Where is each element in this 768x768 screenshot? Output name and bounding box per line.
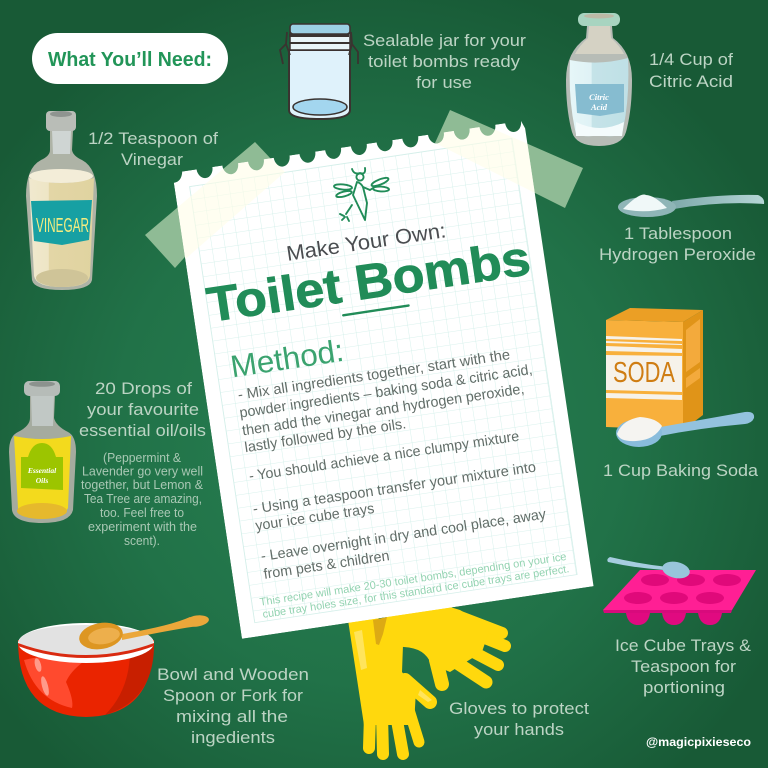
- icon: citric acid bottle: [566, 13, 632, 146]
- label: essential oils: 20 Drops of: [95, 379, 192, 398]
- note: essential oil suggestions: [81, 451, 204, 548]
- paper sheet: [166, 115, 601, 645]
- label: essential oils: your favourite: [87, 400, 199, 419]
- method steps: lastly followed by the oils.: [244, 416, 407, 456]
- paper grid: [190, 138, 577, 623]
- note: essential oil suggestions: Lavender go very well: [82, 464, 203, 478]
- label: gloves: [449, 699, 589, 739]
- label: citric acid: 1/4 Cup of: [649, 50, 733, 69]
- label: vinegar: Vinegar: [121, 150, 183, 169]
- label: essential oils: [79, 379, 206, 440]
- note paper: [174, 121, 594, 639]
- icon: essential oil bottle: Essential: [27, 466, 57, 475]
- tape behind paper: [145, 110, 583, 268]
- note: essential oil suggestions: together, but Lemon &: [81, 478, 204, 492]
- label: bowl: mixing all the: [176, 707, 288, 726]
- note: essential oil suggestions: too. Feel free to: [100, 506, 184, 520]
- label: bowl: ingedients: [191, 728, 275, 747]
- label: trays: [615, 636, 752, 697]
- note: essential oil suggestions: scent).: [124, 534, 160, 548]
- method steps: - Leave overnight in dry and cool place, away: [260, 506, 548, 565]
- icon: essential oil bottle: [9, 381, 76, 523]
- label: bowl: Spoon or Fork for: [163, 686, 303, 705]
- pill heading: [32, 33, 228, 84]
- label: trays: Ice Cube Trays &: [615, 636, 752, 655]
- label: gloves: Gloves to protect: [449, 699, 589, 718]
- note: essential oil suggestions: experiment with the: [88, 520, 197, 534]
- title: toilet bombs: Toilet Bombs: [203, 231, 534, 333]
- title underline: [343, 306, 409, 315]
- icon: vinegar bottle: [26, 111, 97, 290]
- method steps: - Using a teaspoon transfer your mixture into: [252, 460, 537, 518]
- icon: soda box and spoon: [606, 308, 754, 447]
- method steps: then add the vinegar and hydrogen peroxide,: [241, 381, 525, 439]
- method steps: - Mix all ingredients together, start with the: [237, 347, 511, 404]
- label: baking soda: 1 Cup Baking Soda: [603, 461, 759, 480]
- label: jar: for use: [416, 73, 472, 92]
- icon: citric acid bottle: Citric: [589, 92, 609, 102]
- label: bowl: Bowl and Wooden: [157, 665, 309, 684]
- label: peroxide: [599, 224, 756, 264]
- label: trays: portioning: [643, 678, 725, 697]
- label: bowl: [157, 665, 309, 747]
- label: peroxide: Hydrogen Peroxide: [599, 245, 756, 264]
- label: jar: toilet bombs ready: [368, 52, 521, 71]
- note: essential oil suggestions: (Peppermint &: [103, 451, 182, 465]
- icon: vinegar bottle: VINEGAR: [36, 215, 89, 237]
- icon: bowl and wooden spoon: [18, 614, 210, 717]
- label: citric acid: [649, 50, 733, 91]
- icon: pixie logo: [334, 168, 389, 221]
- note: essential oil suggestions: Tea Tree are amazing,: [84, 492, 202, 506]
- method steps: powder ingredients – baking soda & citric acid,: [238, 362, 534, 422]
- footnote: cube tray holes size, for this standard ice cube trays are perfect.: [262, 563, 570, 621]
- method steps: - You should achieve a nice clumpy mixture: [248, 429, 520, 485]
- method steps: [235, 344, 558, 583]
- method steps: your ice cube trays: [254, 501, 375, 534]
- heading: make your own: Make Your Own:: [285, 219, 448, 266]
- label: vinegar: 1/2 Teaspoon of: [88, 129, 218, 148]
- icon: soda box and spoon: SODA: [613, 357, 675, 389]
- icon: glass jar: [280, 24, 358, 119]
- icon: citric acid bottle: Acid: [590, 102, 608, 112]
- icon: tablespoon of peroxide: [618, 195, 764, 217]
- label: citric acid: Citric Acid: [649, 72, 733, 91]
- tape overlay on paper: [178, 127, 535, 259]
- label: trays: Teaspoon for: [631, 657, 736, 676]
- icon: essential oil bottle: Oils: [36, 476, 48, 485]
- label: jar: [363, 31, 526, 92]
- label: jar: Sealable jar for your: [363, 31, 526, 50]
- label: gloves: your hands: [474, 720, 564, 739]
- pill heading: What You’ll Need:: [48, 49, 212, 71]
- method steps: from pets & children: [263, 548, 391, 583]
- label: vinegar: [88, 129, 218, 169]
- label: peroxide: 1 Tablespoon: [624, 224, 732, 243]
- label: essential oils: essential oil/oils: [79, 421, 206, 440]
- credit: @magicpixieseco: [646, 735, 751, 749]
- icon: rubber gloves: [348, 604, 505, 754]
- footnote: This recipe will make 20-30 toilet bombs, depending on your ice: [259, 551, 567, 609]
- icon: ice cube tray and teaspoon: [603, 557, 756, 625]
- heading: method: Method:: [228, 333, 346, 384]
